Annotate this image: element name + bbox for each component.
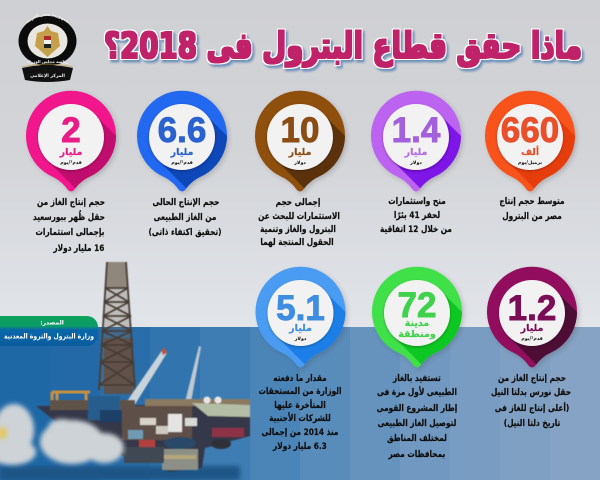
pin: 10 billion: 10: [281, 111, 319, 150]
pin: 72 cities: 72: [398, 286, 436, 325]
pin: 1.2 billion: [487, 266, 581, 370]
description: من الغاز الطبيعى: [154, 211, 216, 223]
description: المتأخرة عليها: [274, 398, 326, 411]
panel: oil output: [485, 90, 579, 222]
description: البترول والغاز وتنمية: [260, 223, 336, 235]
description: منذ 2014 من إجمالى: [262, 426, 338, 438]
logo: cabinet media center emblem: [18, 14, 76, 82]
derrick tower: [106, 262, 127, 288]
description: (تحقيق اكتفاء ذاتى): [149, 226, 222, 238]
description: مقدار ما دفعته: [273, 372, 327, 384]
panel: exploration investments: [255, 90, 349, 248]
pin: 1.4 billion: [371, 90, 465, 195]
description: متوسط حجم إنتاج: [499, 195, 565, 207]
pin: 72 cities: مدينة: [405, 318, 429, 329]
pin: 5.1 billion: دولار: [294, 336, 307, 342]
description: الاستثمارات للبحث عن: [258, 210, 340, 222]
description: 6.3 مليار دولار: [272, 440, 327, 452]
description: [377, 372, 457, 460]
icon: eagle: [35, 26, 60, 57]
pin: 10 billion: مليار: [288, 147, 311, 158]
logo: cabinet media center emblem: رئاسة مجلس الوزراء: [27, 59, 68, 64]
pin: 660 thousand: برميل/يوم: [518, 160, 542, 166]
pin: 2 billion: 2: [61, 111, 81, 150]
description: تستفيد بالغاز: [392, 372, 441, 384]
description: بإجمالى استثمارات: [36, 226, 104, 238]
description: [149, 196, 222, 238]
pin: 6.6 billion: قدم³/يوم: [171, 160, 193, 166]
description: حجم الإنتاج الحالى: [153, 196, 219, 208]
pin: 660 thousand: ألف: [521, 145, 539, 158]
containers: [168, 414, 182, 432]
description: حجم إنتاج الغاز من: [37, 196, 105, 208]
description: مصر من البترول: [502, 210, 562, 222]
description: للشركات الأجنبية: [269, 412, 331, 424]
pin: 1.4 billion: دولار: [409, 160, 422, 166]
description: (أعلى إنتاج للغاز فى: [495, 401, 569, 414]
description: الوزارة من المستحقات: [259, 385, 342, 397]
pin: 10 billion: [255, 90, 349, 195]
deck: [36, 404, 250, 472]
logo: cabinet media center emblem: المركز الإعلامى: [30, 73, 65, 79]
description: [33, 196, 105, 254]
pin: 72 cities: [372, 266, 466, 370]
pin: 6.6 billion: 6.6: [158, 111, 206, 150]
source banner: المصدر:: [40, 320, 64, 326]
pin: 2 billion: قدم³/يوم: [60, 160, 82, 166]
helideck: [192, 403, 250, 417]
pin: 660 thousand: [485, 90, 579, 195]
water spray: [0, 404, 124, 465]
pin: 72 cities: ومنطقة: [398, 329, 436, 340]
pin: 6.6 billion: مليار: [170, 147, 193, 158]
pin: 660 thousand: 660: [501, 111, 559, 150]
description: منح واستثمارات: [388, 195, 446, 207]
pin: 2 billion: [26, 90, 120, 195]
panel: natural gas output: [137, 90, 231, 238]
description: [499, 195, 565, 222]
orange gantry: [52, 392, 90, 404]
pin: 6.6 billion: [137, 90, 231, 195]
pin: 1.2 billion: قدم³/يوم: [521, 336, 543, 342]
description: الطبيعى لأول مرة فى: [377, 386, 457, 398]
description: من خلال 12 اتفاقية: [380, 223, 452, 235]
description: تاريخ دلتا النيل): [504, 417, 560, 429]
description: لحفر 41 بئرًا: [394, 209, 440, 221]
description: لمختلف المناطق: [387, 432, 447, 444]
description: إجمالى حجم: [276, 196, 320, 207]
description: حقل نورس بدلتا النيل: [491, 386, 571, 398]
description: [380, 195, 452, 235]
logo: cabinet media center emblem: جمهورية مصر العربية: [26, 14, 68, 24]
pin: 5.1 billion: [256, 266, 350, 370]
source banner: وزارة البترول والثروة المعدنية: [4, 332, 94, 340]
description: إطار المشروع القومى: [377, 402, 457, 414]
pin: 1.2 billion: 1.2: [508, 289, 556, 328]
pin: 10 billion: دولار: [293, 160, 306, 166]
panel: Nooros field: [487, 266, 581, 428]
pin: 1.4 billion: 1.4: [392, 111, 441, 150]
description: الحقول المنتجة لهما: [260, 236, 334, 248]
description: حجم إنتاج الغاز من: [498, 372, 566, 384]
pin: 5.1 billion: مليار: [288, 323, 312, 334]
photo: offshore drilling rig: [0, 262, 250, 480]
panel: grants for wells: [371, 90, 465, 234]
pin: 1.2 billion: مليار: [520, 323, 543, 334]
panel: gas from Zohr field: [26, 90, 120, 254]
description: بمحافظات مصر: [388, 448, 445, 460]
cranes: [121, 349, 167, 414]
pin: 1.4 billion: مليار: [404, 147, 427, 158]
description: 16 مليار دولار: [53, 242, 105, 254]
description: [258, 196, 340, 248]
description: [259, 372, 342, 452]
panel: cities connected to gas: [372, 266, 466, 460]
description: [491, 372, 571, 429]
description: لتوصيل الغاز الطبيعى: [378, 417, 456, 429]
panel: foreign company dues: [256, 266, 350, 452]
description: حقل ظُهر ببورسعيد: [33, 209, 105, 223]
source banner: [0, 316, 98, 346]
pin: 2 billion: مليار: [59, 147, 82, 158]
pin: 5.1 billion: 5.1: [276, 289, 325, 328]
